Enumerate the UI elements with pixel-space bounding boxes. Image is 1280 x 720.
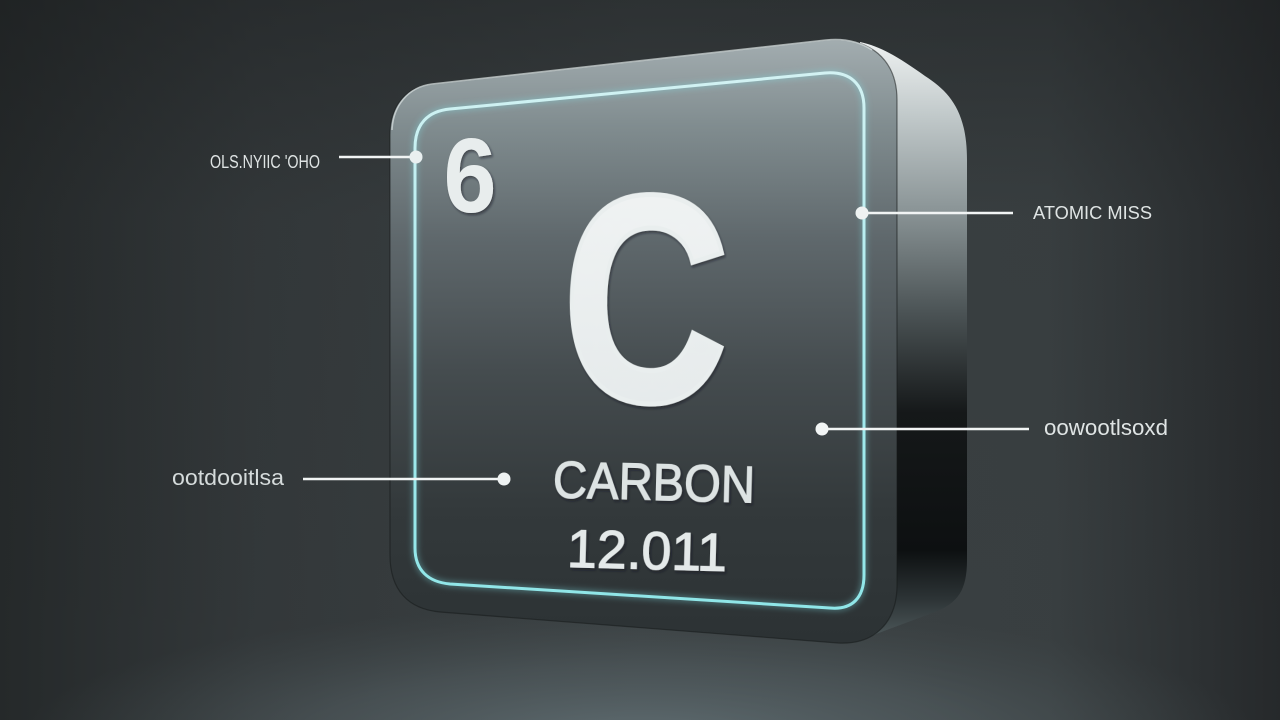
atomic mass value: 12.011 (566, 519, 728, 583)
neon frame glow (415, 73, 864, 608)
label: ATOMIC MISS (1033, 203, 1152, 223)
marker dot (816, 422, 828, 436)
tile top highlight (392, 39, 872, 130)
neon frame (415, 73, 864, 608)
leader line (303, 478, 504, 480)
callout: top left (210, 150, 422, 172)
label: oowootlsoxd (1044, 415, 1168, 440)
atomic number: 6 (444, 117, 496, 235)
tile front face (390, 40, 897, 643)
leader line (339, 156, 416, 158)
tile side face (860, 42, 967, 640)
callout: atomic mass (856, 203, 1152, 223)
callout: right (816, 415, 1168, 440)
label: OLS.NYIIC 'OHO (210, 152, 320, 172)
element name: CARBON (552, 451, 756, 515)
marker dot (410, 150, 422, 164)
label: ootdooitlsa (172, 465, 285, 490)
element symbol: C (558, 132, 733, 467)
leader line (862, 212, 1013, 214)
leader line (822, 428, 1029, 430)
marker dot (856, 206, 868, 220)
element tile (390, 39, 967, 643)
callout: lower left (172, 465, 510, 490)
marker dot (498, 472, 510, 486)
